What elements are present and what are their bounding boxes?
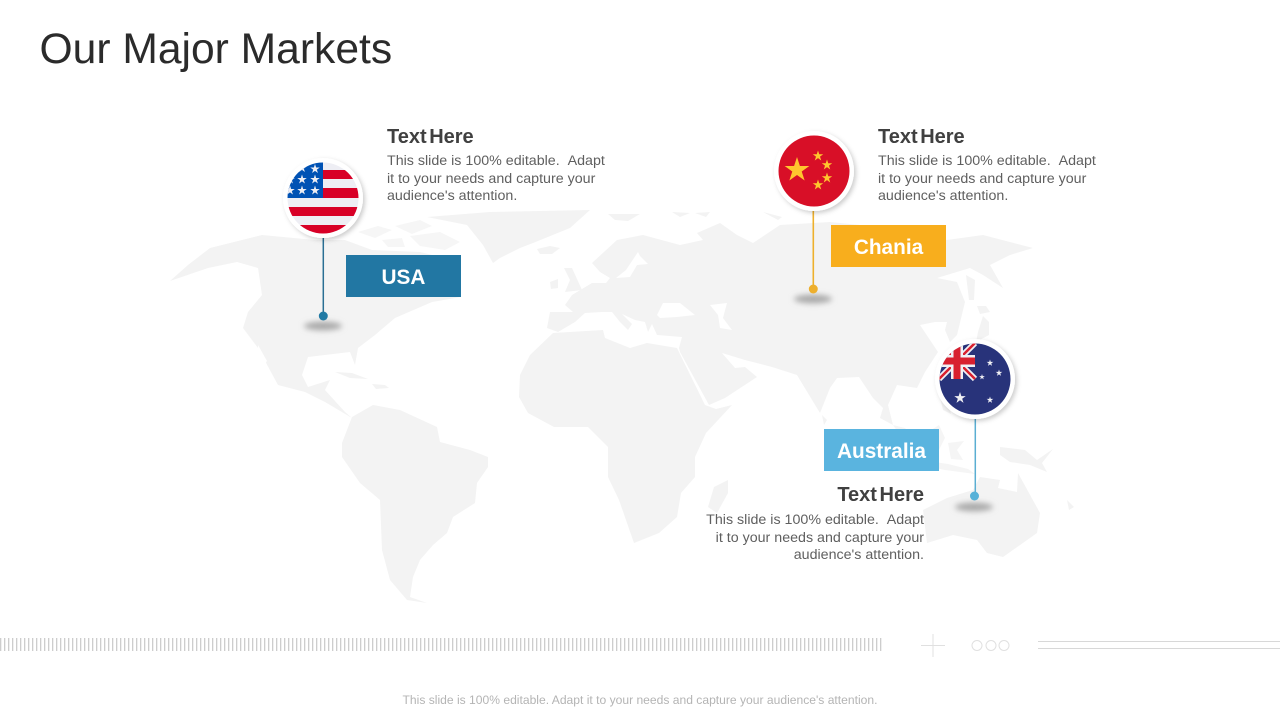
label: china: Chania	[854, 236, 923, 259]
text block: australia: Text Here	[837, 484, 924, 506]
text block: usa: Text Here	[387, 126, 474, 148]
baltic sea	[616, 252, 648, 278]
label: australia	[824, 429, 939, 471]
pin: australia	[935, 339, 1019, 515]
footer decoration: double rule	[1038, 641, 1280, 649]
madagascar	[708, 480, 728, 513]
text block: usa: it to your needs and capture your	[387, 171, 595, 187]
text block: usa: This slide is 100% editable. Adapt	[387, 153, 605, 169]
text block: china: it to your needs and capture your	[878, 171, 1086, 187]
caspian sea	[710, 303, 732, 330]
footer decoration: plus and circles	[921, 634, 1010, 657]
pin: china	[774, 131, 858, 307]
label: china	[831, 225, 946, 267]
sri lanka	[822, 415, 827, 425]
britain and ireland	[550, 268, 582, 292]
new zealand	[1067, 500, 1074, 510]
text block: australia: audience's attention.	[794, 547, 924, 563]
arctic islands	[358, 220, 460, 250]
africa	[519, 330, 732, 543]
eurasia	[547, 222, 1033, 425]
text block: china: audience's attention.	[878, 188, 1008, 204]
black sea	[657, 303, 695, 318]
japan	[966, 275, 990, 342]
title: Our Major Markets	[40, 25, 392, 73]
text block: australia	[706, 484, 924, 563]
text block: australia: This slide is 100% editable. Adapt	[706, 512, 924, 528]
north america	[170, 235, 461, 418]
text block: china: This slide is 100% editable. Adapt	[878, 153, 1096, 169]
text block: usa: audience's attention.	[387, 188, 517, 204]
australia	[923, 473, 1040, 557]
south america	[342, 405, 488, 603]
pin: usa	[283, 158, 367, 334]
indonesia	[893, 425, 975, 474]
greenland	[427, 210, 590, 263]
text block: australia: it to your needs and capture your	[716, 530, 924, 546]
iceland	[537, 246, 560, 254]
label: usa	[346, 255, 461, 297]
text block: china	[878, 126, 1096, 204]
caribbean islands	[335, 372, 389, 389]
svalbard and north islands	[608, 212, 782, 221]
text block: usa	[387, 126, 605, 204]
label: australia: Australia	[837, 440, 926, 463]
gulf of california	[258, 345, 267, 365]
philippines	[940, 397, 951, 414]
label: usa: USA	[382, 266, 425, 289]
footer note: This slide is 100% editable. Adapt it to your needs and capture your audience's attention.	[403, 693, 877, 707]
text block: china: Text Here	[878, 126, 965, 148]
new guinea	[1000, 447, 1053, 472]
decorative tick strip	[0, 638, 882, 651]
